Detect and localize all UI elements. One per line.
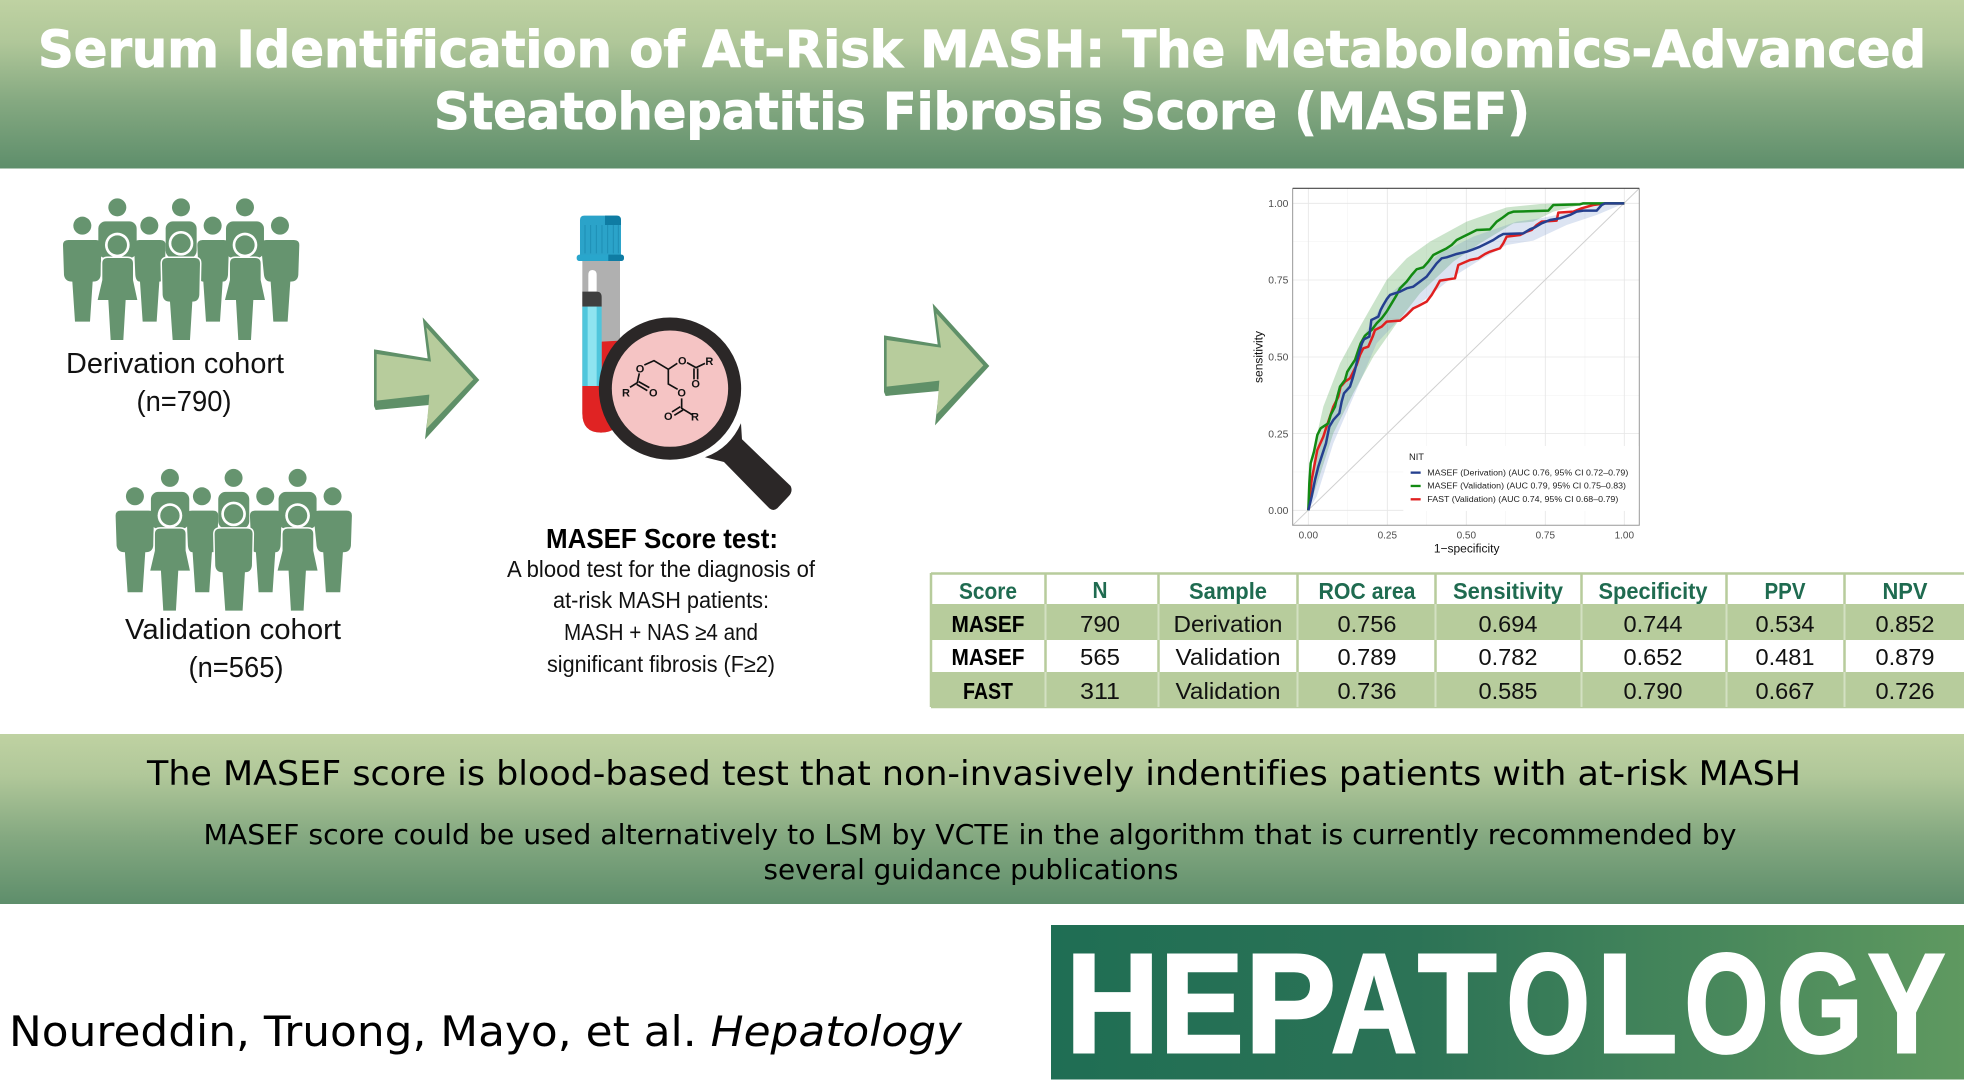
y axis ticks <box>1268 199 1289 517</box>
table header: Score <box>959 578 1017 604</box>
text: MASEF score test description: at-risk MASH patients: <box>553 587 769 613</box>
table row: MASEF validation: 0.782 <box>1478 644 1538 670</box>
table row: FAST validation: 311 <box>1080 678 1120 704</box>
text: MASEF score test description <box>507 523 816 677</box>
label: derivation cohort: Derivation cohort <box>66 348 284 380</box>
table header: Sample <box>1189 578 1267 604</box>
curve: MASEF validation <box>1308 203 1624 510</box>
title text: Steatohepatitis Fibrosis Score (MASEF) <box>434 83 1530 142</box>
y axis ticks: 0.50 <box>1268 353 1289 364</box>
table row: MASEF validation: 0.879 <box>1876 644 1934 670</box>
molecule: triglyceride: O <box>649 388 658 400</box>
curve: FAST validation <box>1308 203 1624 510</box>
label: validation cohort <box>125 614 341 684</box>
table row: MASEF validation: Validation <box>1176 644 1280 670</box>
table header: Specificity <box>1598 578 1708 604</box>
table header: ROC area <box>1318 578 1416 604</box>
arrow: cohorts to test <box>374 317 479 439</box>
legend: MASEF (Validation) (AUC 0.79, 95% CI 0.75–0.83) <box>1427 482 1626 491</box>
title text <box>38 21 1926 142</box>
table row: FAST validation: 0.585 <box>1478 678 1538 704</box>
journal logo: HEPATOLOGY: T <box>1418 924 1496 1080</box>
text: MASEF score test description: MASEF Score test: <box>546 523 778 554</box>
table row: MASEF derivation: 0.852 <box>1876 611 1934 637</box>
legend: NIT <box>1409 452 1424 462</box>
x axis ticks <box>1299 531 1634 542</box>
journal logo: HEPATOLOGY: O <box>1684 924 1768 1080</box>
x axis ticks: 0.25 <box>1378 531 1397 542</box>
journal logo: HEPATOLOGY <box>1051 924 1964 1080</box>
table row: MASEF derivation: 0.534 <box>1756 611 1815 637</box>
molecule: triglyceride: O <box>691 378 700 390</box>
molecule: triglyceride: O <box>664 411 673 423</box>
table row: FAST validation: 0.790 <box>1624 678 1682 704</box>
chart: ROC curves <box>1252 188 1639 556</box>
molecule: triglyceride: R <box>691 412 699 424</box>
table: performance metrics <box>931 573 1964 707</box>
y axis title: sensitivity <box>1252 331 1266 383</box>
legend: FAST (Validation) (AUC 0.74, 95% CI 0.68–0.79) <box>1427 495 1619 504</box>
y axis ticks: 1.00 <box>1268 199 1289 210</box>
journal logo: HEPATOLOGY: E <box>1160 924 1244 1080</box>
legend <box>1403 446 1639 511</box>
y axis ticks: 0.00 <box>1268 506 1289 517</box>
journal logo: HEPATOLOGY: A <box>1331 924 1417 1080</box>
legend: MASEF (Derivation) (AUC 0.76, 95% CI 0.72–0.79) <box>1427 468 1629 477</box>
table row: MASEF validation: 0.652 <box>1624 644 1682 670</box>
label: derivation cohort: (n=790) <box>136 386 232 418</box>
table header: Sensitivity <box>1453 578 1563 604</box>
table header <box>959 577 1928 604</box>
citation: Noureddin, Truong, Mayo, et al. Hepatology <box>9 1007 963 1056</box>
x axis ticks: 0.50 <box>1457 531 1476 542</box>
journal logo: HEPATOLOGY: P <box>1245 924 1336 1080</box>
conclusion banner <box>0 734 1964 904</box>
table row: MASEF derivation: 790 <box>1080 611 1120 637</box>
table row: MASEF validation: MASEF <box>952 644 1024 670</box>
table row: MASEF derivation: MASEF <box>952 611 1024 637</box>
table row: FAST validation: FAST <box>963 678 1013 704</box>
table row: FAST validation: 0.736 <box>1338 678 1396 704</box>
molecule: triglyceride <box>622 356 713 424</box>
title text: Serum Identification of At-Risk MASH: The Metabolomics-Advanced <box>38 21 1926 80</box>
journal logo: HEPATOLOGY: H <box>1066 924 1159 1080</box>
confidence band: MASEF derivation <box>1308 203 1624 510</box>
molecule: triglyceride: O <box>677 388 686 400</box>
table row: MASEF derivation: 0.694 <box>1478 611 1538 637</box>
table row: FAST validation: 0.667 <box>1756 678 1814 704</box>
table header: NPV <box>1882 578 1928 604</box>
text: MASEF score test description: significant fibrosis (F≥2) <box>547 651 775 677</box>
molecule: triglyceride: O <box>636 363 645 375</box>
table row: MASEF derivation: 0.756 <box>1338 611 1396 637</box>
table row: FAST validation <box>963 678 1934 704</box>
confidence band: MASEF validation <box>1308 203 1624 510</box>
table row: MASEF validation: 0.789 <box>1338 644 1396 670</box>
magnifier <box>605 324 792 510</box>
table row: MASEF derivation <box>952 611 1934 637</box>
text: MASEF score test description: MASH + NAS ≥4 and <box>564 619 758 645</box>
curve: MASEF derivation <box>1308 203 1624 510</box>
label: derivation cohort <box>66 348 284 418</box>
x axis ticks: 1.00 <box>1615 531 1634 542</box>
arrow: test to results <box>884 303 989 425</box>
table row: FAST validation: 0.726 <box>1876 678 1934 704</box>
table row: MASEF validation <box>952 644 1934 670</box>
journal logo: HEPATOLOGY: L <box>1596 924 1678 1080</box>
journal logo: HEPATOLOGY: G <box>1777 924 1863 1080</box>
table row: MASEF derivation: 0.744 <box>1624 611 1683 637</box>
blood tube <box>577 216 624 433</box>
x axis ticks: 0.75 <box>1536 531 1555 542</box>
label: validation cohort: (n=565) <box>188 652 284 684</box>
icon: validation cohort crowd <box>116 469 352 611</box>
molecule: triglyceride: O <box>678 356 687 368</box>
table header: N <box>1092 577 1108 603</box>
label: validation cohort: Validation cohort <box>125 614 341 646</box>
table row: FAST validation: Validation <box>1176 678 1280 704</box>
table header: PPV <box>1764 578 1806 604</box>
conclusion text: The MASEF score is blood-based test that non-invasively indentifies patients with at-risk MASH <box>146 754 1801 794</box>
journal logo: HEPATOLOGY: Y <box>1868 924 1945 1080</box>
icon: derivation cohort crowd <box>63 198 299 340</box>
table row: MASEF validation: 0.481 <box>1756 644 1814 670</box>
y axis ticks: 0.25 <box>1268 429 1289 440</box>
x axis title: 1−specificity <box>1434 542 1499 556</box>
conclusion text: MASEF score could be used alternatively to LSM by VCTE in the algorithm that is currently recommended by <box>204 818 1736 851</box>
journal logo: HEPATOLOGY: O <box>1506 924 1590 1080</box>
table row: MASEF validation: 565 <box>1080 644 1120 670</box>
title banner <box>0 0 1964 168</box>
molecule: triglyceride: R <box>705 356 713 368</box>
conclusion text: several guidance publications <box>764 853 1178 886</box>
icon: blood tube and magnifier <box>577 216 792 510</box>
x axis ticks: 0.00 <box>1299 531 1318 542</box>
table row: MASEF derivation: Derivation <box>1174 611 1282 637</box>
conclusion text <box>146 754 1801 886</box>
y axis ticks: 0.75 <box>1268 276 1289 287</box>
molecule: triglyceride: R <box>622 388 630 400</box>
text: MASEF score test description: A blood test for the diagnosis of <box>507 556 816 582</box>
